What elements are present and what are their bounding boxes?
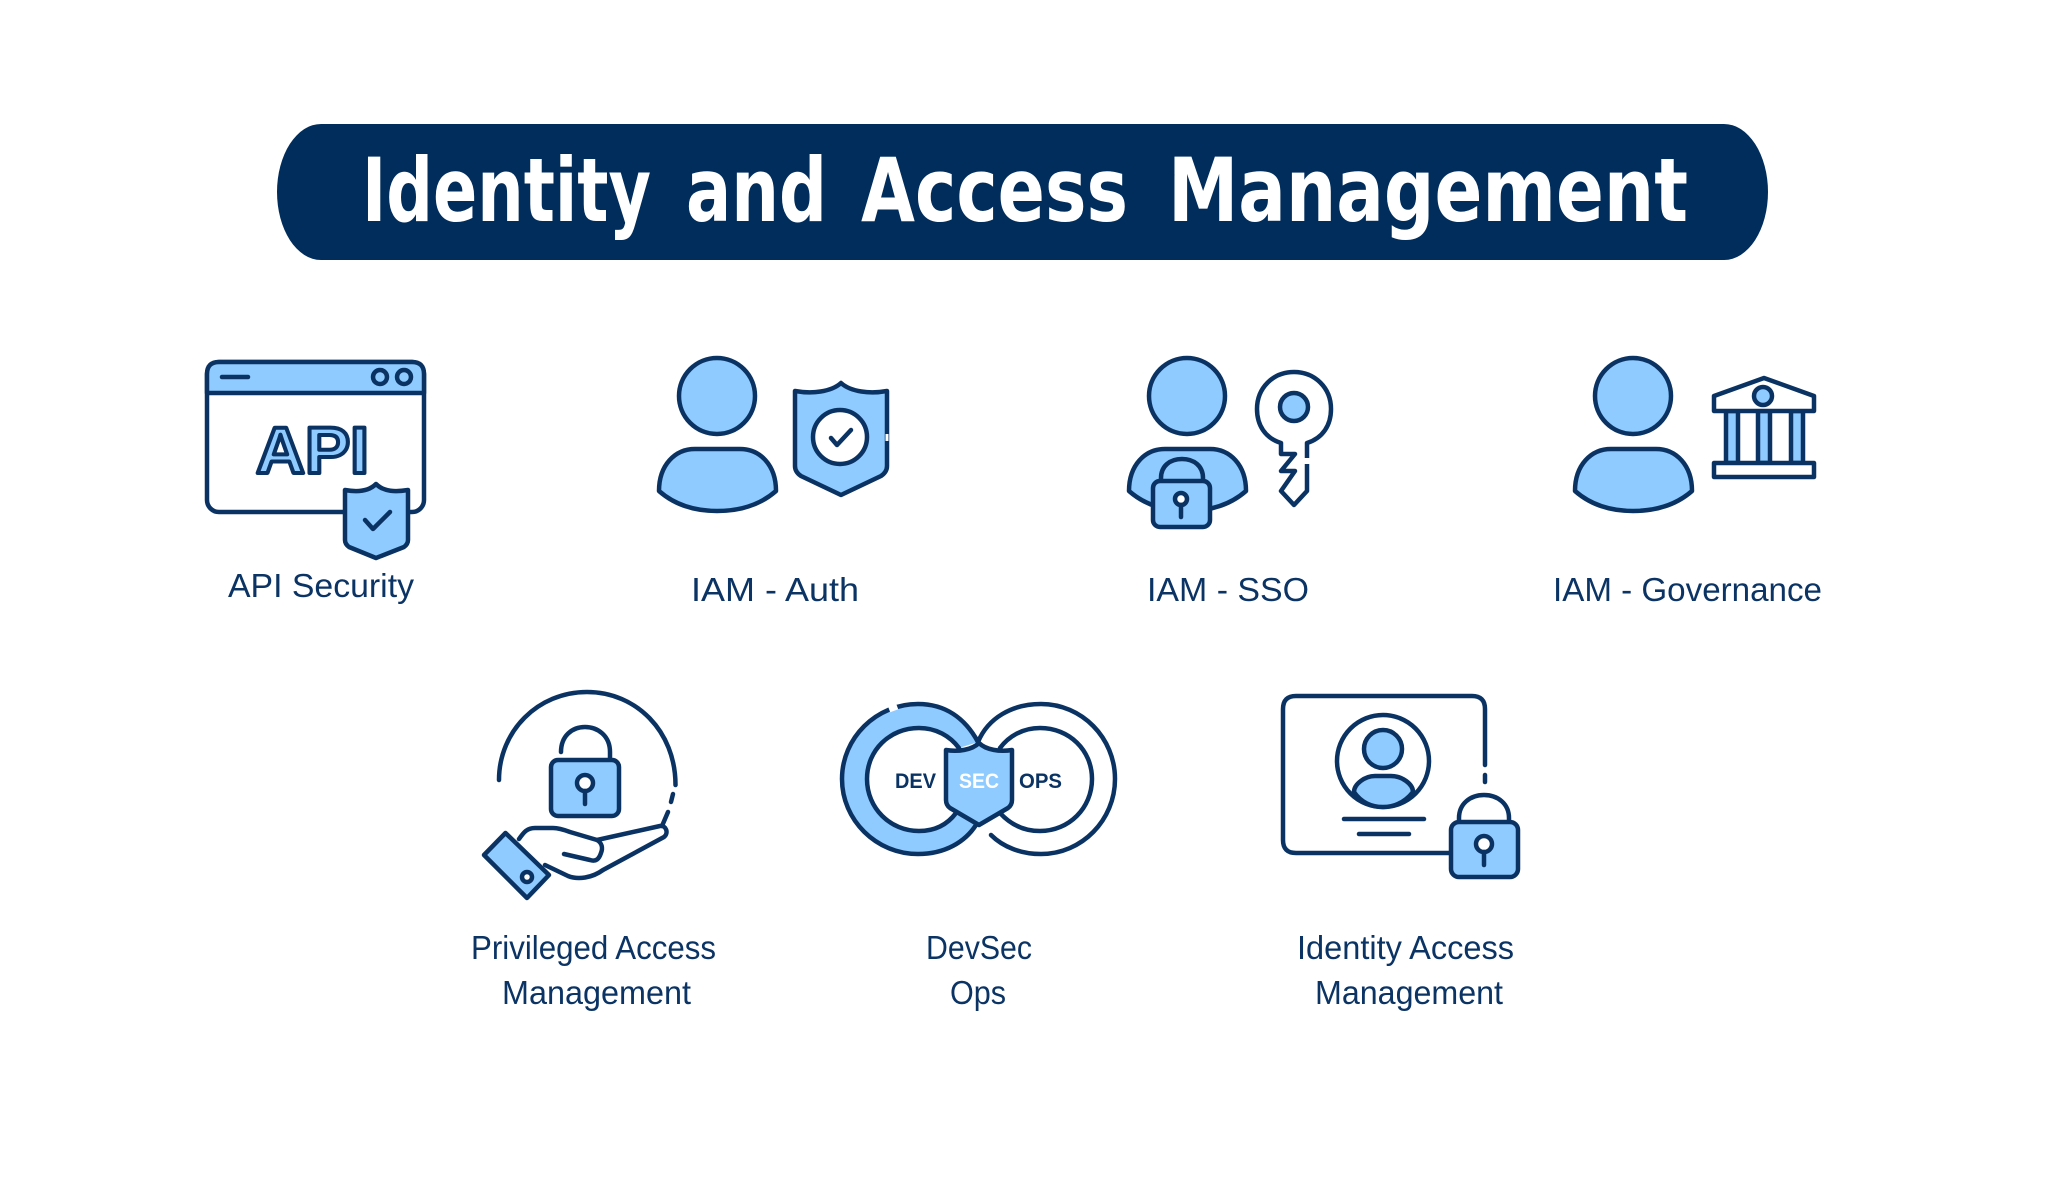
icon: ID card with padlock — [1283, 696, 1518, 877]
icon: infinity loop with shield: OPS — [1019, 770, 1062, 793]
icon: infinity loop with shield: DEV — [895, 770, 936, 793]
icon: person with institution building — [1575, 358, 1814, 511]
label: IAM - Auth — [691, 571, 859, 608]
label: Management — [1315, 974, 1503, 1011]
label: IAM - SSO — [1147, 571, 1309, 608]
icon: infinity loop with shield — [842, 704, 1115, 854]
title banner: Identity — [362, 139, 651, 242]
title banner — [277, 124, 1768, 260]
label — [926, 929, 1032, 1011]
label — [471, 929, 716, 1011]
label: Ops — [950, 974, 1006, 1011]
label: Management — [502, 974, 691, 1011]
label: DevSec — [926, 929, 1032, 966]
icon: hand holding padlock — [484, 692, 676, 898]
icon: API browser window with shield: API — [256, 413, 369, 487]
panel: IAM - Auth — [659, 358, 887, 608]
icon: infinity loop with shield: SEC — [959, 770, 999, 793]
panel: API Security — [207, 362, 424, 604]
panel: Identity Access Management — [1283, 696, 1518, 1011]
icon: person with shield — [659, 358, 887, 511]
title banner: Management — [1168, 139, 1688, 242]
panel: DevSecOps — [842, 704, 1115, 1011]
label: Identity Access — [1297, 929, 1514, 966]
label: IAM - Governance — [1553, 571, 1822, 608]
title banner: and — [686, 139, 827, 242]
icon: person with padlock and key — [1129, 358, 1331, 527]
label: Privileged Access — [471, 929, 716, 966]
label: API Security — [228, 567, 414, 604]
panel: Privileged Access Management — [471, 692, 716, 1011]
panel: IAM - SSO — [1129, 358, 1331, 608]
icon: API browser window with shield — [207, 362, 424, 558]
panel: IAM - Governance — [1553, 358, 1822, 608]
label — [1297, 929, 1514, 1011]
title banner: Access — [861, 139, 1128, 242]
